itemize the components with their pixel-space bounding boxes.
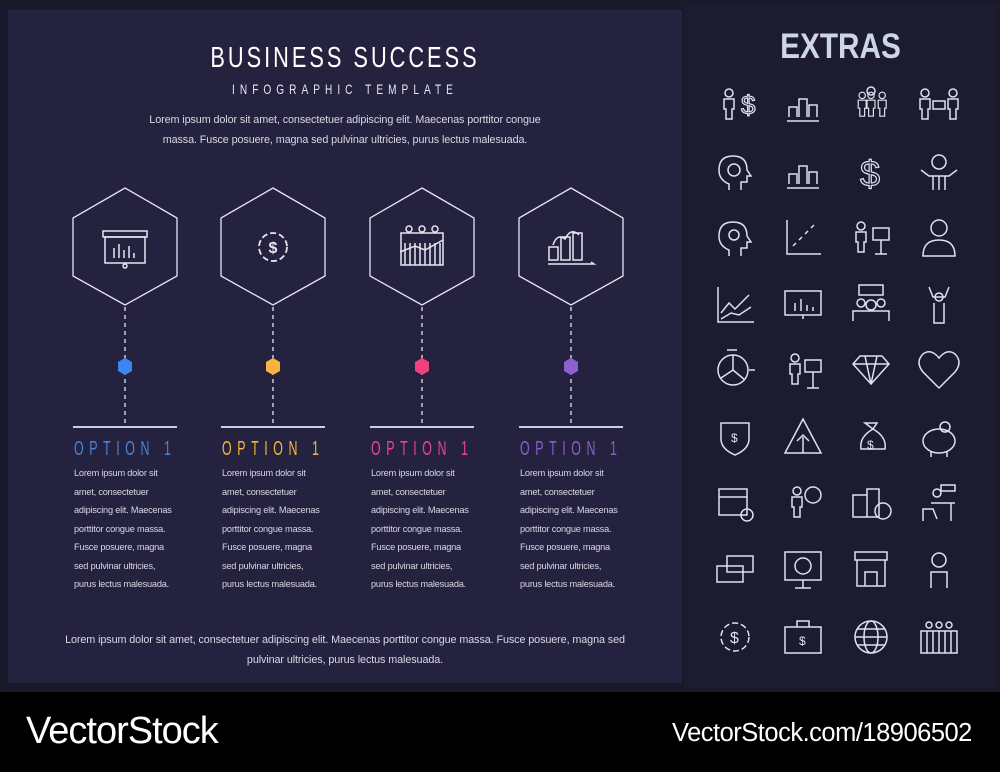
- option 2 text: Lorem ipsum dolor sit: [222, 468, 306, 478]
- option 1 text: sed pulvinar ultricies,: [74, 560, 155, 570]
- footer text: pulvinar ultricies, purus lectus malesuada.: [247, 654, 443, 666]
- option 1 text: Lorem ipsum dolor sit: [74, 468, 158, 478]
- watermark logo: VectorStock: [26, 710, 218, 752]
- footer text: [65, 634, 625, 666]
- option 2 text: sed pulvinar ultricies,: [222, 560, 303, 570]
- option 2 text: [222, 468, 320, 589]
- intro text: massa. Fusce posuere, magna sed pulvinar ultricies, purus lectus malesuada.: [163, 134, 527, 146]
- option 3 hexagon: [370, 188, 474, 305]
- icon grid: $: [731, 431, 738, 445]
- option 3 text: adipiscing elit. Maecenas: [371, 505, 469, 515]
- intro text: [149, 114, 541, 146]
- icon grid: $: [867, 438, 874, 452]
- option 4 text: adipiscing elit. Maecenas: [520, 505, 618, 515]
- option 3 text: [371, 468, 469, 589]
- option 2 text: adipiscing elit. Maecenas: [222, 505, 320, 515]
- extras heading: EXTRAS: [780, 27, 901, 66]
- option 1 text: amet, consectetuer: [74, 486, 149, 496]
- option 2 heading: OPTION 1: [222, 438, 325, 460]
- option 2 text: amet, consectetuer: [222, 486, 297, 496]
- option 1 text: Fusce posuere, magna: [74, 542, 164, 552]
- option 1 text: [74, 468, 172, 589]
- option 4 text: sed pulvinar ultricies,: [520, 560, 601, 570]
- option 4 text: Fusce posuere, magna: [520, 542, 610, 552]
- option 2 hexagon: $: [269, 240, 278, 257]
- option 4 text: [520, 468, 618, 589]
- option 1 text: porttitor congue massa.: [74, 524, 165, 534]
- icon grid: $: [730, 630, 739, 647]
- dot markers: [118, 358, 578, 375]
- option 2 text: porttitor congue massa.: [222, 524, 313, 534]
- panel: main infographic: [8, 10, 682, 683]
- option 4 heading: OPTION 1: [520, 438, 623, 460]
- option 4 text: porttitor congue massa.: [520, 524, 611, 534]
- icon grid: $: [860, 153, 880, 194]
- panel: extras: [684, 4, 997, 688]
- option 3 text: sed pulvinar ultricies,: [371, 560, 452, 570]
- option 2 hexagon: [221, 188, 325, 305]
- option 1 heading: OPTION 1: [74, 438, 177, 460]
- option 4 text: purus lectus malesuada.: [520, 579, 615, 589]
- intro text: Lorem ipsum dolor sit amet, consectetuer adipiscing elit. Maecenas porttitor congue: [149, 114, 541, 126]
- option 3 text: Fusce posuere, magna: [371, 542, 461, 552]
- icon grid: $: [799, 634, 806, 648]
- subtitle: INFOGRAPHIC TEMPLATE: [232, 81, 458, 97]
- icon grid: [716, 86, 960, 654]
- option 1 hexagon: [73, 188, 177, 305]
- option 3 text: amet, consectetuer: [371, 486, 446, 496]
- option 2 text: purus lectus malesuada.: [222, 579, 317, 589]
- option 4 text: Lorem ipsum dolor sit: [520, 468, 604, 478]
- option 3 text: purus lectus malesuada.: [371, 579, 466, 589]
- option 3 heading: OPTION 1: [371, 438, 474, 460]
- option 4 text: amet, consectetuer: [520, 486, 595, 496]
- option 3 text: porttitor congue massa.: [371, 524, 462, 534]
- option 1 text: purus lectus malesuada.: [74, 579, 169, 589]
- watermark url: VectorStock.com/18906502: [672, 719, 972, 747]
- option 4 hexagon: [519, 188, 623, 305]
- footer text: Lorem ipsum dolor sit amet, consectetuer adipiscing elit. Maecenas porttitor congue massa. Fusce posuere, magna sed: [65, 634, 625, 646]
- option 3 text: Lorem ipsum dolor sit: [371, 468, 455, 478]
- timeline graphics: [72, 187, 624, 428]
- option 1 text: adipiscing elit. Maecenas: [74, 505, 172, 515]
- icon grid: $: [741, 90, 756, 120]
- title: BUSINESS SUCCESS: [210, 42, 480, 74]
- option 2 text: Fusce posuere, magna: [222, 542, 312, 552]
